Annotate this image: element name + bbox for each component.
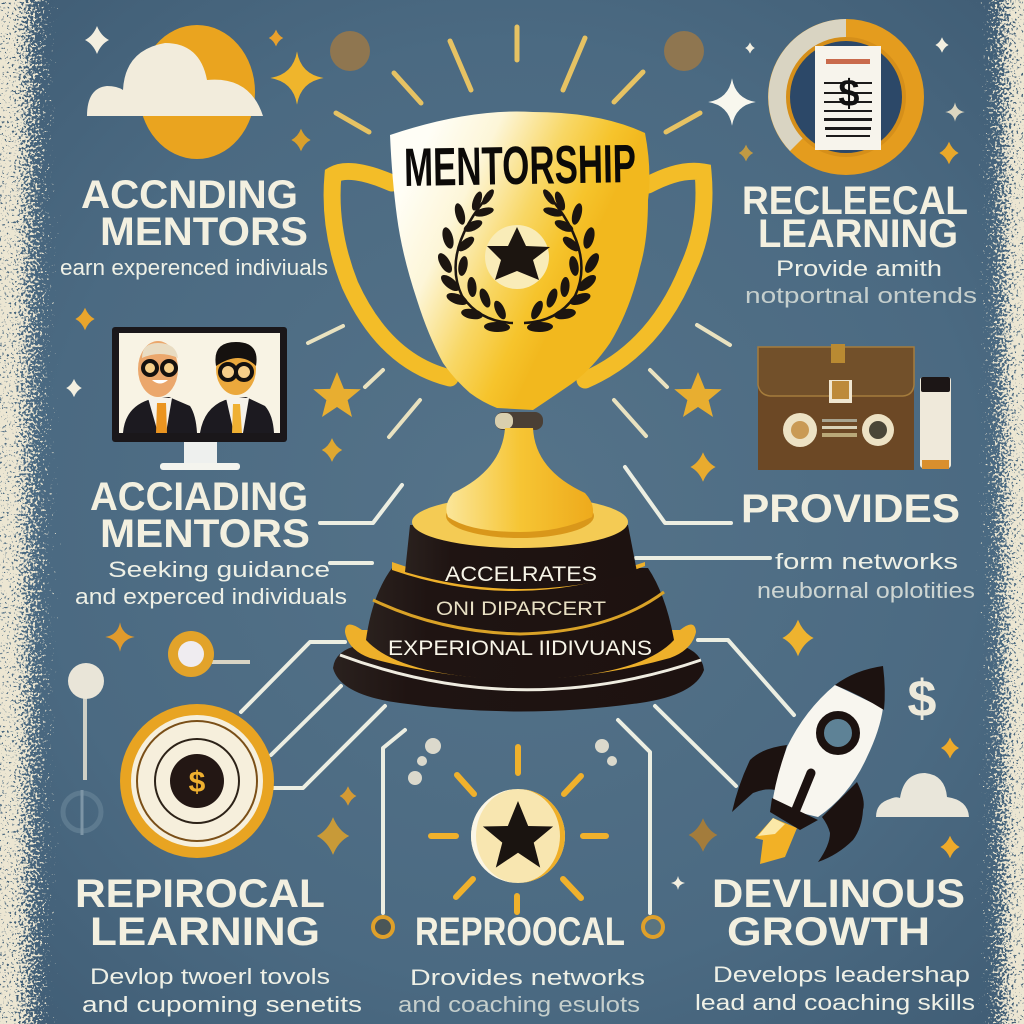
stars middle left	[66, 308, 361, 462]
text block: acciading mentors: MENTORS	[100, 512, 310, 556]
icon: document in golden ring	[768, 19, 924, 175]
text block: reciprocal learning top: notportnal ontends	[745, 283, 977, 308]
text block: acciading mentors: and experced individuals	[75, 584, 347, 609]
text block: devlinous growth: DEVLINOUS	[712, 872, 965, 916]
icon: document in golden ring: $	[838, 73, 860, 115]
icon: small orb with connector	[168, 631, 250, 677]
text block: devlinous growth: Develops leadershap	[713, 962, 970, 987]
text block: reciprocal learning bottom left: Devlop twoerl tovols	[90, 964, 330, 989]
icon: small sphere right	[664, 31, 704, 71]
text block: accending mentors: ACCNDING	[81, 173, 298, 217]
text block: reciprocal learning bottom left	[75, 872, 362, 1017]
icon: rocket	[732, 666, 885, 864]
text block: devlinous growth: GROWTH	[727, 910, 930, 954]
pedestal: EXPERIONAL IIDIVUANS	[388, 637, 652, 660]
icon: small sphere left	[330, 31, 370, 71]
text block: reciprocal center: Drovides networks	[410, 965, 645, 990]
text block: accending mentors	[60, 173, 328, 280]
text block: provides: neubornal oplotities	[757, 578, 975, 603]
lower trophy rays	[308, 325, 730, 437]
sparkles top	[85, 26, 965, 164]
text block: reciprocal center: REPROOCAL	[415, 910, 625, 954]
top tier	[405, 525, 637, 589]
bottom tier	[333, 645, 704, 712]
icon: briefcase and bottle	[758, 344, 951, 470]
pedestal text: ACCELRATES	[445, 563, 597, 586]
stem	[446, 428, 593, 532]
handles	[332, 171, 704, 380]
text block: provides: form networks	[775, 549, 958, 574]
laurel wreath	[435, 188, 602, 332]
title: MENTORSHIP	[404, 134, 637, 198]
nose	[835, 666, 885, 710]
connector end nodes	[373, 917, 663, 937]
text block: reciprocal learning top: LEARNING	[758, 212, 958, 256]
icon: dollar sign: $	[908, 670, 937, 728]
text block: reciprocal learning top	[742, 179, 977, 308]
text block: reciprocal learning bottom left: and cupoming senetits	[82, 992, 362, 1017]
text block: reciprocal learning top: Provide amith	[776, 256, 942, 281]
text block: reciprocal learning bottom left: REPIROCAL	[75, 872, 325, 916]
text block: reciprocal learning bottom left: LEARNING	[90, 910, 320, 954]
small dots above badge	[408, 738, 617, 785]
pedestal: ONI DIPARCERT	[436, 599, 606, 620]
text block: reciprocal center: and coaching esulots	[398, 992, 640, 1017]
icon: small cloud	[876, 773, 969, 817]
text block: accending mentors: earn experenced indiviuals	[60, 255, 328, 280]
icon: gold coin medallion: $	[189, 766, 206, 799]
icon: cloud and sun	[87, 25, 263, 159]
middle tier	[366, 568, 674, 680]
icon: video monitor with two mentors	[112, 327, 287, 470]
top rays	[336, 27, 700, 132]
text block: accending mentors: MENTORS	[100, 210, 308, 254]
band	[770, 798, 818, 830]
icon: central star badge with rays	[431, 747, 606, 912]
fins	[732, 745, 787, 812]
trophy	[332, 111, 704, 430]
text block: reciprocal learning top: RECLEECAL	[742, 179, 968, 223]
pedestal	[333, 428, 704, 712]
bowl	[390, 111, 649, 410]
stars lower left	[317, 738, 960, 890]
icon: pendant ball	[63, 663, 104, 835]
text block: provides	[741, 487, 975, 603]
text block: reciprocal center	[398, 910, 645, 1017]
text block: acciading mentors	[75, 475, 347, 609]
body	[772, 685, 883, 817]
icon: gold coin medallion	[120, 704, 274, 858]
text block: acciading mentors: Seeking guidance	[108, 557, 330, 582]
text block: devlinous growth: lead and coaching skills	[695, 990, 975, 1015]
text block: provides: PROVIDES	[741, 487, 960, 531]
flame	[755, 818, 797, 864]
text block: acciading mentors: ACCIADING	[90, 475, 308, 519]
text block: devlinous growth	[695, 872, 975, 1015]
star emblem	[487, 227, 550, 280]
knob	[495, 412, 543, 430]
stars middle right	[105, 372, 814, 656]
connector lines	[241, 467, 794, 913]
porthole	[820, 715, 856, 751]
